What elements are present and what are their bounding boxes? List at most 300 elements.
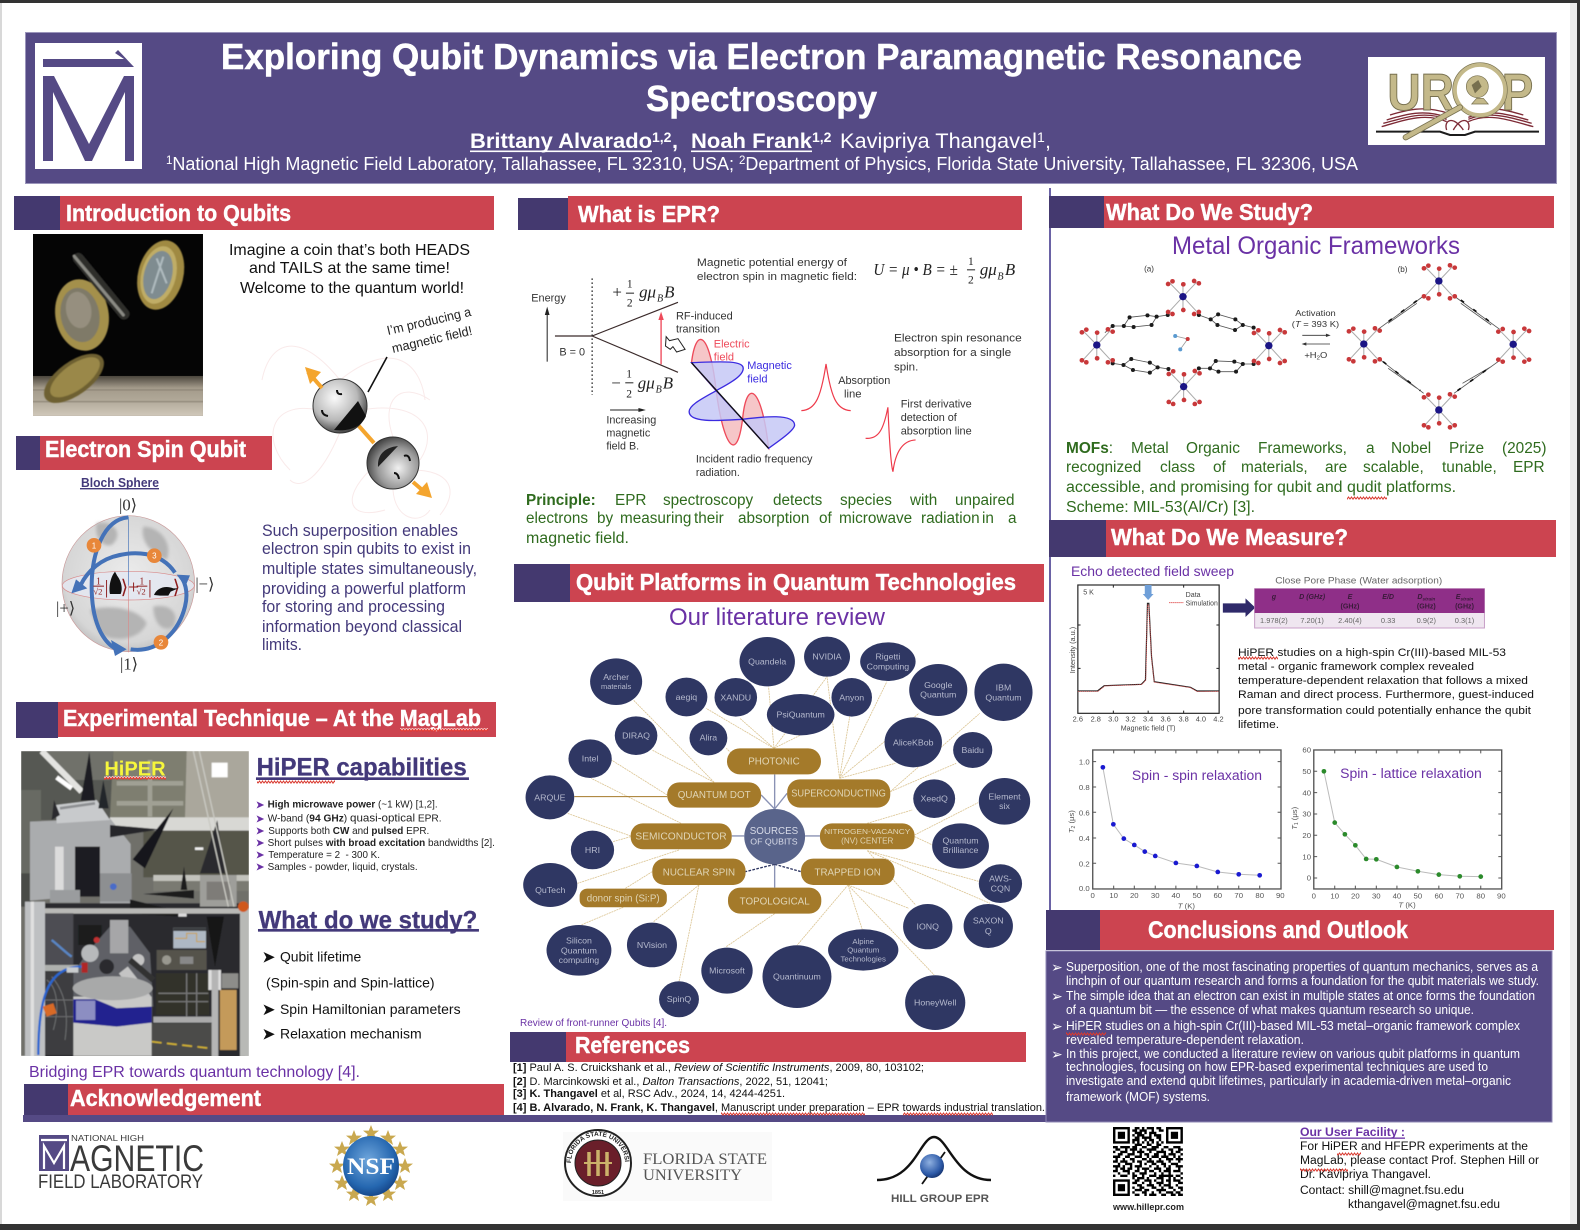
list: HiPER capabilities: ➤ xyxy=(255,860,265,874)
diagram: mind map of qubit sources: Quantinuum xyxy=(773,972,821,982)
illustration: Bloch sphere: |0⟩ xyxy=(119,496,137,515)
text: principle: EPR xyxy=(615,492,646,509)
table: close pore phase parameters: Close Pore Phase (Water adsorption) xyxy=(1275,574,1442,585)
contact: our user facility: Contact: shill@magnet.fsu.edu xyxy=(1300,1185,1464,1197)
panel body: conclusions text: In this project, we conducted a literature review on various qubit platforms in quantum xyxy=(1066,1047,1520,1061)
text: principle: in xyxy=(982,510,994,527)
diagram: EPR energy levels and absorption: absorption line xyxy=(901,425,972,437)
diagram: EPR energy levels and absorption: − xyxy=(611,373,621,392)
heading: Qubit Platforms: Qubit Platforms in Quantum Technologies xyxy=(576,569,1016,595)
heading: references: References xyxy=(575,1032,690,1058)
panel: Conclusions and Outlook xyxy=(1046,910,1554,1122)
panel: What Do We Measure xyxy=(1049,520,1556,910)
affiliations: 1 xyxy=(166,155,172,167)
diagram: mind map of qubit sources: PsiQuantum xyxy=(777,710,825,720)
heading: Electron Spin Qubit: Electron Spin Qubit xyxy=(45,436,246,462)
heading: What Do We Measure xyxy=(1049,520,1556,557)
diagram: mind map of qubit sources: NITROGEN-VACANCY xyxy=(824,827,910,836)
diagram: EPR energy levels and absorption: electron spin in magnetic field: xyxy=(697,271,857,283)
diagram: mind map of qubit sources: NVision xyxy=(637,940,667,950)
diagram: EPR energy levels and absorption: B xyxy=(997,271,1004,282)
chart: spin-spin relaxation: 30 xyxy=(1151,891,1160,900)
diagram: EPR energy levels and absorption: B xyxy=(1005,260,1015,279)
text: HiPER studies summary: HiPER studies on a high-spin Cr(III)-based MIL-53 xyxy=(1238,647,1506,659)
title: Spectroscopy xyxy=(646,78,877,119)
chart: spin-spin relaxation: 0.6 xyxy=(1079,808,1090,817)
panel body: conclusions text: linchpin of our quantum research and forms a foundation for the qubit materials we study. xyxy=(1066,974,1539,988)
illustration: spinning electrons producing a magnetic field: magnetic field! xyxy=(390,323,474,356)
diagram: mind map of qubit sources: Element xyxy=(988,791,1021,801)
diagram: mind map of qubit sources: Q xyxy=(985,926,992,936)
text: principle: species xyxy=(840,492,892,509)
diagram: mind map of qubit sources: IONQ xyxy=(917,922,939,932)
chart: spin-lattice relaxation: 0 xyxy=(1312,891,1316,900)
photo: HiPER spectrometer: HiPER xyxy=(104,758,166,781)
authors: 1,2 xyxy=(652,129,672,145)
reference list: [3] K. Thangavel et al, RSC Adv., 2024, 14, 4244-4251. xyxy=(513,1088,785,1100)
diagram: EPR energy levels and absorption: Magnetic potential energy of xyxy=(697,257,848,269)
logo: Hill Group EPR: HILL GROUP EPR xyxy=(891,1193,989,1205)
diagram: mind map of qubit sources: SpinQ xyxy=(667,994,691,1004)
panel body: conclusions text xyxy=(1046,951,1552,1122)
diagram: EPR energy levels and absorption: Electron spin resonance xyxy=(894,333,1022,345)
diagram: EPR energy levels and absorption: B xyxy=(656,385,662,396)
table: close pore phase parameters: strain xyxy=(1460,596,1473,601)
chart: spin-lattice relaxation: 50 xyxy=(1414,891,1422,900)
subheading: our literature review: Our literature review xyxy=(669,604,886,631)
panel body: conclusions text: of a quantum bit — the essence of what makes quantum research so unique. xyxy=(1066,1003,1474,1017)
caption: review of front-runner qubits: Review of front-runner Qubits [4]. xyxy=(520,1017,667,1029)
contact: our user facility: MagLab, please contact Prof. Stephen Hill or xyxy=(1300,1155,1539,1167)
text: MOFs description: recognized xyxy=(1066,459,1141,476)
panel: Acknowledgement xyxy=(23,1084,1047,1122)
panel body: conclusions text: ➢ xyxy=(1051,989,1063,1005)
chart: echo detected field sweep: 3.8 xyxy=(1178,715,1189,724)
heading: conclusions: Conclusions and Outlook xyxy=(1148,917,1409,944)
text: principle: absorption xyxy=(738,510,809,527)
chart: echo detected field sweep: Data xyxy=(1186,592,1201,599)
illustration: Bloch sphere: 2 xyxy=(159,638,164,647)
text: MOFs description xyxy=(1066,440,1546,516)
diagram: mind map of qubit sources: Microsoft xyxy=(709,965,745,975)
table: close pore phase parameters: D (GHz) xyxy=(1299,594,1326,601)
text: MOFs description: Prize xyxy=(1449,440,1484,457)
text: superposition description: information beyond classical xyxy=(262,618,462,636)
text: superposition description: for storing and processing xyxy=(262,598,445,616)
chart: echo detected field sweep: 3.6 xyxy=(1161,715,1171,724)
diagram: EPR energy levels and absorption: B xyxy=(657,294,663,305)
diagram: EPR energy levels and absorption: gμ xyxy=(980,260,997,279)
diagram: mind map of qubit sources: donor spin (Si:P) xyxy=(587,893,660,904)
chart: spin-spin relaxation: 0.4 xyxy=(1079,834,1090,843)
chart: spin-lattice relaxation: (μs) xyxy=(1290,806,1299,822)
text: principle: a xyxy=(1008,510,1017,527)
list: HiPER capabilities: ➤ xyxy=(255,836,265,850)
authors: , xyxy=(672,129,678,153)
panel body: conclusions text: HiPER studies on a high-spin Cr(III)-based MIL-53 metal–organic framework complex xyxy=(1066,1019,1521,1033)
text: principle: with xyxy=(909,492,937,509)
diagram: mind map of qubit sources: (NV) CENTER xyxy=(841,836,894,845)
chart: spin-spin relaxation: 0.0 xyxy=(1079,884,1090,893)
text: MOFs description: Scheme: MIL-53(Al/Cr) [3]. xyxy=(1066,499,1255,516)
text: HiPER studies summary xyxy=(1238,647,1534,731)
panel body: conclusions text: ➢ xyxy=(1051,960,1063,976)
heading: references xyxy=(510,1032,1026,1062)
chart: spin-lattice relaxation xyxy=(1290,746,1506,909)
list: HiPER capabilities xyxy=(255,797,495,874)
photo: floating coins xyxy=(33,234,203,416)
heading: What is EPR xyxy=(518,196,1022,230)
text: MOFs description: Frameworks, xyxy=(1258,440,1347,457)
chart: spin-lattice relaxation: T (K) xyxy=(1398,900,1416,909)
diagram: MIL-53 activation scheme: (T = 393 K) xyxy=(1292,319,1339,329)
list: what do we study: Spin Hamiltonian parameters xyxy=(280,1001,461,1017)
panel body: conclusions text: The simple idea that an electron can exist in multiple states at once forms the foundation xyxy=(1066,989,1535,1003)
diagram: mind map of qubit sources: Computing xyxy=(867,662,909,672)
chart: echo detected field sweep: 5 K xyxy=(1083,590,1094,597)
authors: 1,2 xyxy=(812,129,832,145)
list: HiPER capabilities: ➤ xyxy=(255,848,265,862)
chart: spin-spin relaxation: 20 xyxy=(1130,891,1139,900)
text: HiPER studies summary: lifetime. xyxy=(1238,719,1279,731)
chart: spin-lattice relaxation: 20 xyxy=(1351,891,1360,900)
heading: Electron Spin Qubit xyxy=(16,436,272,470)
logo: Florida State University xyxy=(564,1129,767,1197)
illustration: Bloch sphere: 1 xyxy=(92,541,97,550)
table: close pore phase parameters: 0.9(2) xyxy=(1417,616,1436,625)
list: HiPER capabilities: Supports both CW and pulsed EPR. xyxy=(268,826,429,837)
list: what do we study: ➤ xyxy=(262,948,276,967)
diagram: EPR energy levels and absorption: 1 xyxy=(968,256,974,268)
list: HiPER capabilities: Temperature = 2 - 300 K. xyxy=(268,850,380,861)
diagram: EPR energy levels and absorption: 1 xyxy=(627,279,633,291)
diagram: EPR energy levels and absorption: detection of xyxy=(901,412,958,424)
contact: our user facility xyxy=(1300,1127,1539,1211)
diagram: mind map of qubit sources: OF QUBITS xyxy=(750,837,798,847)
text: MOFs description: class xyxy=(1160,459,1195,476)
diagram: mind map of qubit sources: DIRAQ xyxy=(622,731,650,741)
diagram: EPR energy levels and absorption: Incident radio frequency xyxy=(696,454,813,466)
diagram: EPR energy levels and absorption: B xyxy=(664,282,674,301)
panel body: conclusions text: ➢ xyxy=(1051,1019,1063,1035)
chart: echo detected field sweep: 3.2 xyxy=(1125,715,1136,724)
affiliations: National High Magnetic Field Laboratory, Tallahassee, FL 32310, USA; xyxy=(172,154,739,174)
illustration: Bloch sphere: ⟩ xyxy=(173,577,180,598)
panel: Experimental Technique xyxy=(16,702,496,1081)
diagram: EPR energy levels and absorption: Electric xyxy=(714,338,750,350)
diagram: mind map of qubit sources: six xyxy=(999,801,1011,811)
chart: spin-lattice relaxation: 20 xyxy=(1302,831,1311,840)
text: superposition description xyxy=(262,522,477,654)
authors: Noah Frank xyxy=(691,129,812,153)
chart: spin-spin relaxation: 70 xyxy=(1234,891,1243,900)
diagram: mind map of qubit sources: Technologies xyxy=(841,954,886,963)
diagram: mind map of qubit sources: AWS- xyxy=(989,874,1012,884)
logo: Hill Group EPR xyxy=(877,1137,991,1205)
diagram: mind map of qubit sources: ARQUE xyxy=(534,792,566,802)
chart: spin-spin relaxation: (μs) xyxy=(1067,810,1076,826)
text: HiPER studies summary: metal - organic framework complex revealed xyxy=(1238,661,1474,673)
diagram: mind map of qubit sources: HRI xyxy=(585,845,600,855)
heading: What Do We Study: What Do We Study? xyxy=(1106,199,1313,225)
diagram: mind map of qubit sources: PHOTONIC xyxy=(748,757,800,768)
diagram: mind map of qubit sources: Archer xyxy=(603,672,629,682)
subheading: metal organic frameworks: Metal Organic Frameworks xyxy=(1172,232,1460,260)
label: Bloch Sphere: Bloch Sphere xyxy=(81,476,159,490)
logo: Florida State University: 1851 xyxy=(592,1190,604,1196)
diagram: EPR energy levels and absorption: First derivative xyxy=(901,399,972,411)
panel body: conclusions text: ➢ xyxy=(1051,1047,1063,1063)
chart: echo detected field sweep: 2.8 xyxy=(1091,715,1101,724)
list: what do we study xyxy=(262,948,461,1043)
chart: spin-lattice relaxation: 50 xyxy=(1302,767,1311,776)
caption: bridging EPR: Bridging EPR towards quantum technology [4]. xyxy=(29,1064,360,1081)
diagram: mind map of qubit sources: Intel xyxy=(582,754,598,764)
text: HiPER studies summary: Raman and direct process. Furthermore, guest-induced xyxy=(1238,689,1534,701)
chart: spin-spin relaxation: 2 xyxy=(1071,825,1077,828)
chart: spin-lattice relaxation: 10 xyxy=(1302,852,1311,861)
diagram: mind map of qubit sources: CQN xyxy=(991,883,1010,893)
text: imagine a coin: Imagine a coin that’s both HEADS xyxy=(229,242,470,259)
diagram: mind map of qubit sources: aegiq xyxy=(676,692,697,702)
table: close pore phase parameters: 1.978(2) xyxy=(1260,616,1288,625)
text: superposition description: Such superposition enables xyxy=(262,522,458,540)
diagram: MIL-53 activation scheme: (a) xyxy=(1144,265,1154,274)
reference list: [1] Paul A. S. Cruickshank et al., Review of Scientific Instruments, 2009, 80, 103102; xyxy=(513,1062,924,1074)
diagram: mind map of qubit sources: Brilliance xyxy=(943,845,979,855)
text: superposition description: providing a powerful platform xyxy=(262,580,466,598)
heading: What do we study (HiPER): What do we study? xyxy=(259,906,477,934)
title xyxy=(221,36,1302,119)
chart: spin-spin relaxation: Spin - spin relaxation xyxy=(1132,767,1262,783)
diagram: MIL-53 activation scheme: 2 xyxy=(1317,356,1320,362)
diagram: EPR energy levels and absorption xyxy=(531,256,1022,479)
illustration: Bloch sphere: √2 xyxy=(137,587,146,597)
panel: references xyxy=(510,1032,1047,1115)
diagram: mind map of qubit sources: NUCLEAR SPIN xyxy=(663,867,735,878)
illustration: spinning electrons producing a magnetic field xyxy=(262,304,474,518)
authors: Kavipriya Thangavel xyxy=(840,129,1037,153)
text: HiPER studies summary: temperature-dependent relaxation that follows a mixed xyxy=(1238,675,1528,687)
text: MOFs description: Nobel xyxy=(1391,440,1431,457)
title banner xyxy=(26,32,1556,184)
chart: spin-lattice relaxation: 1 xyxy=(1294,822,1300,825)
heading: What is EPR: What is EPR? xyxy=(578,201,720,227)
authors xyxy=(470,129,1051,153)
diagram: mind map of qubit sources: Alpine xyxy=(852,937,874,946)
illustration: Bloch sphere: |1⟩ xyxy=(120,654,138,673)
text: principle: of xyxy=(819,510,833,527)
contact: our user facility: Dr. Kavipriya Thangavel. xyxy=(1300,1169,1431,1181)
text: principle: by xyxy=(597,510,614,527)
table: close pore phase parameters: (GHz) xyxy=(1455,603,1474,610)
panel: Introduction to Qubits xyxy=(14,196,494,518)
table: close pore phase parameters: D xyxy=(1417,594,1422,601)
text: MOFs description: accessible, and promising for qubit and qudit platforms. xyxy=(1066,479,1456,496)
diagram: EPR energy levels and absorption: radiation. xyxy=(696,467,740,479)
chart: echo detected field sweep: 3.0 xyxy=(1108,715,1119,724)
text: MOFs description: EPR xyxy=(1513,459,1545,476)
text: principle: magnetic field. xyxy=(526,530,629,547)
diagram: EPR energy levels and absorption: 2 xyxy=(627,298,633,310)
logo: Florida State University: UNIVERSITY xyxy=(643,1167,742,1184)
illustration: Bloch sphere: ⟩+ xyxy=(121,577,139,598)
chart: spin-lattice relaxation: 80 xyxy=(1476,891,1485,900)
table: close pore phase parameters: 2.40(4) xyxy=(1338,616,1362,625)
diagram: EPR energy levels and absorption: Absorption xyxy=(838,375,890,387)
diagram: EPR energy levels and absorption: field xyxy=(714,352,734,364)
diagram: EPR energy levels and absorption: + xyxy=(612,282,622,301)
diagram: EPR energy levels and absorption: RF-induced xyxy=(676,310,733,322)
diagram: EPR energy levels and absorption: field xyxy=(747,373,768,385)
authors: Brittany Alvarado xyxy=(470,129,652,153)
list: HiPER capabilities: W-band (94 GHz) quasi-optical EPR. xyxy=(268,813,442,825)
chart: spin-lattice relaxation: 0 xyxy=(1307,874,1311,883)
logo: NSF: NSF xyxy=(347,1154,395,1179)
table: close pore phase parameters: 7.20(1) xyxy=(1300,616,1324,625)
text: imagine a coin: Welcome to the quantum world! xyxy=(240,280,464,297)
panel body: conclusions text: revealed temperature-dependent relaxation. xyxy=(1066,1033,1304,1047)
illustration: Bloch sphere: |−⟩ xyxy=(195,574,215,593)
panel body: conclusions text: technologies, focusing on how EPR-based experimental techniques are used to xyxy=(1066,1060,1488,1074)
diagram: MIL-53 activation scheme: O xyxy=(1320,350,1328,360)
diagram: mind map of qubit sources: Quantum xyxy=(847,946,879,955)
diagram: EPR energy levels and absorption: gμ xyxy=(638,373,655,392)
diagram: mind map of qubit sources: XANDU xyxy=(720,692,751,702)
logo: National High Magnetic Field Laboratory: AGNETIC xyxy=(70,1138,204,1179)
QR code xyxy=(1112,1128,1184,1212)
diagram: MIL-53 activation scheme: Activation xyxy=(1295,308,1336,318)
reference list: [4] B. Alvarado, N. Frank, K. Thangavel, Manuscript under preparation – EPR towards industrial translation. xyxy=(513,1102,1045,1114)
illustration: Bloch sphere: 1 xyxy=(139,577,144,588)
title: Exploring Qubit Dynamics via Electron Paramagnetic Resonance xyxy=(221,36,1302,77)
diagram: EPR energy levels and absorption: field B. xyxy=(606,440,639,452)
diagram: mind map of qubit sources: SOURCES xyxy=(750,826,799,837)
logo: National High Magnetic Field Laboratory: NATIONAL HIGH xyxy=(71,1133,144,1143)
diagram: mind map of qubit sources: SEMICONDUCTOR xyxy=(635,831,727,842)
panel body: conclusions text: investigate and extend qubit lifetimes, particularly in academia-driven metal–organic xyxy=(1066,1074,1511,1088)
diagram: mind map of qubit sources: computing xyxy=(559,955,599,965)
affiliations: Department of Physics, Florida State University, Tallahassee, FL 32306, USA xyxy=(745,154,1358,174)
table: close pore phase parameters: E/D xyxy=(1382,594,1394,601)
chart: spin-spin relaxation xyxy=(1067,750,1285,910)
table: close pore phase parameters: E xyxy=(1456,594,1460,601)
diagram: EPR energy levels and absorption: 2 xyxy=(968,274,974,286)
reference list: [2] D. Marcinkowski et al., Dalton Transactions, 2022, 51, 12041; xyxy=(513,1076,828,1088)
panel: Acknowledgement: Acknowledgement xyxy=(70,1085,261,1111)
affiliations: 2 xyxy=(739,155,745,167)
logo: Florida State University: FLORIDA STATE xyxy=(643,1151,767,1168)
list: what do we study: (Spin-spin and Spin-lattice) xyxy=(266,975,435,991)
text: MOFs description: scalable, xyxy=(1363,459,1424,476)
diagram: EPR energy levels and absorption: Increasing xyxy=(606,414,656,426)
table: close pore phase parameters: (GHz) xyxy=(1417,603,1436,610)
chart: spin-lattice relaxation: 30 xyxy=(1372,891,1381,900)
text: MOFs description: tunable, xyxy=(1442,459,1497,476)
list: HiPER capabilities: Short pulses with broad excitation bandwidths [2]. xyxy=(268,838,495,849)
diagram: mind map of qubit sources: Silicon xyxy=(566,936,592,946)
QR code: www.hillepr.com xyxy=(1112,1202,1184,1212)
illustration: Bloch sphere xyxy=(56,496,215,673)
text: imagine a coin: and TAILS at the same time! xyxy=(249,260,450,277)
diagram: MIL-53 activation scheme: (b) xyxy=(1398,265,1408,274)
icon: MagLab M logo xyxy=(35,43,142,169)
caption: echo detected field sweep: Echo detected field sweep xyxy=(1071,564,1234,579)
list: HiPER capabilities: Samples - powder, liquid, crystals. xyxy=(268,862,418,873)
list: HiPER capabilities: ➤ xyxy=(255,811,265,825)
chart: spin-spin relaxation: T xyxy=(1067,827,1076,833)
chart: echo detected field sweep: 2.6 xyxy=(1073,715,1083,724)
chart: echo detected field sweep: 3.4 xyxy=(1143,715,1153,724)
diagram: mind map of qubit sources xyxy=(523,637,1033,1030)
panel body: conclusions text: framework (MOF) systems. xyxy=(1066,1090,1210,1104)
diagram: MIL-53 activation scheme xyxy=(1080,263,1531,430)
table: close pore phase parameters: strain xyxy=(1422,596,1435,601)
text: principle: measuring xyxy=(620,510,691,527)
authors: 1 xyxy=(1037,129,1045,145)
diagram: mind map of qubit sources: QUANTUM DOT xyxy=(678,790,751,801)
text: HiPER studies summary: pore transformation could potentially enhance the qubit xyxy=(1238,705,1532,717)
contact: our user facility: Our User Facility : xyxy=(1300,1127,1405,1139)
text: MOFs description: (2025) xyxy=(1502,440,1546,457)
list: what do we study: ➤ xyxy=(262,1000,276,1019)
panel body: conclusions text: Superposition, one of the most fascinating properties of quantum mechanics, serves as a xyxy=(1066,960,1538,974)
heading: Qubit Platforms xyxy=(514,564,1044,602)
diagram: mind map of qubit sources: QuTech xyxy=(535,885,565,895)
authors: , xyxy=(1045,129,1051,153)
chart: spin-lattice relaxation: 10 xyxy=(1330,891,1339,900)
diagram: mind map of qubit sources: Baidu xyxy=(961,745,984,755)
list: what do we study: ➤ xyxy=(262,1024,276,1043)
text: principle: Principle: xyxy=(526,492,596,509)
list: what do we study: Qubit lifetime xyxy=(280,949,362,965)
diagram: EPR energy levels and absorption: 2 xyxy=(626,388,632,400)
diagram: mind map of qubit sources: materials xyxy=(601,682,632,691)
text: principle xyxy=(526,492,1017,547)
diagram: EPR energy levels and absorption: line xyxy=(844,388,862,400)
text: MOFs description: : xyxy=(1109,440,1113,457)
chart: spin-lattice relaxation: 90 xyxy=(1497,891,1506,900)
diagram: EPR energy levels and absorption: absorption for a single xyxy=(894,347,1011,359)
chart: spin-lattice relaxation: 40 xyxy=(1302,788,1311,797)
diagram: EPR energy levels and absorption: gμ xyxy=(639,282,656,301)
contact: our user facility: For HiPER and HFEPR experiments at the xyxy=(1300,1141,1528,1153)
chart: spin-lattice relaxation: Spin - lattice relaxation xyxy=(1340,765,1482,781)
text: MOFs description: Organic xyxy=(1186,440,1240,457)
table: close pore phase parameters: g xyxy=(1271,594,1277,601)
table: close pore phase parameters: 0.3(1) xyxy=(1455,616,1474,625)
heading: Introduction to Qubits xyxy=(14,196,494,230)
chart: spin-spin relaxation: 80 xyxy=(1255,891,1264,900)
diagram: MIL-53 activation scheme: +H xyxy=(1304,350,1316,360)
text: principle: electrons xyxy=(526,510,588,527)
text: principle: unpaired xyxy=(955,492,1015,509)
panel: Qubit Platforms in Quantum Technologies xyxy=(514,564,1044,1030)
chart: spin-spin relaxation: 50 xyxy=(1193,891,1201,900)
table: close pore phase parameters: 0.33 xyxy=(1381,616,1395,625)
chart: spin-spin relaxation: 90 xyxy=(1276,891,1285,900)
chart: echo detected field sweep: 4.0 xyxy=(1196,715,1206,724)
logo: National High Magnetic Field Laboratory xyxy=(38,1133,204,1193)
heading: What Do We Study xyxy=(1049,196,1554,228)
chart: spin-spin relaxation: 40 xyxy=(1172,891,1180,900)
illustration: Bloch sphere: √2 xyxy=(93,587,102,597)
photo: HiPER spectrometer xyxy=(21,751,249,1060)
chart: echo detected field sweep xyxy=(1068,585,1224,733)
diagram: mind map of qubit sources: TRAPPED ION xyxy=(814,867,881,878)
text: principle: radiation xyxy=(921,510,980,527)
illustration: Bloch sphere: | xyxy=(105,577,109,598)
